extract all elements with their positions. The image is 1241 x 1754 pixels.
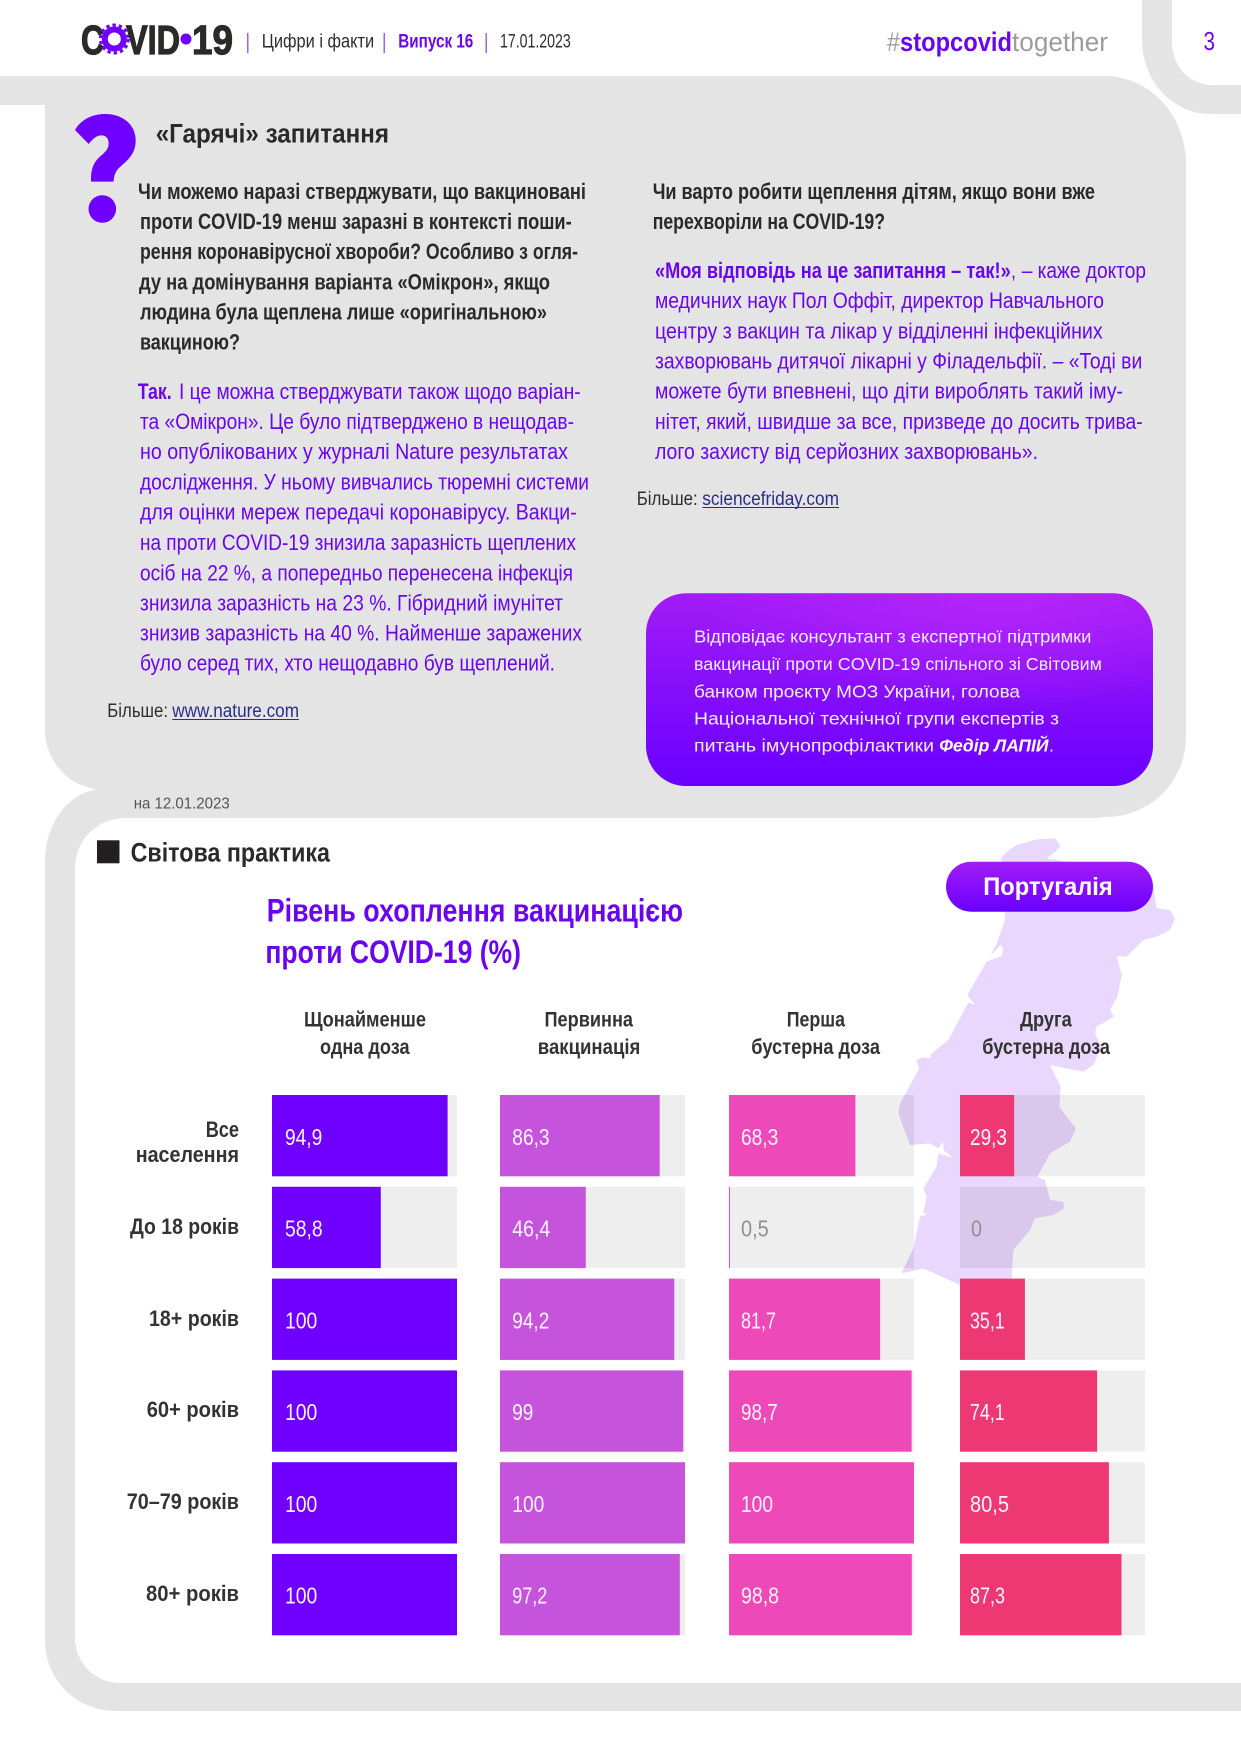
row labels bbox=[127, 1117, 239, 1606]
logo: COVID-19: C bbox=[81, 17, 104, 63]
column headers: бустерна доза bbox=[982, 1036, 1110, 1059]
answer 2: медичних наук Пол Оффіт, директор Навчального bbox=[655, 288, 1104, 313]
chart column: first booster: 98,8 bbox=[741, 1582, 779, 1608]
chart column: second booster: 29,3 bbox=[970, 1124, 1007, 1150]
chart column: at least one dose bbox=[272, 1095, 457, 1635]
chart column: primary vaccination: 86,3 bbox=[512, 1124, 550, 1150]
question 2: перехворіли на COVID-19? bbox=[653, 209, 885, 234]
chart column: at least one dose: 100 bbox=[285, 1399, 317, 1425]
callout: consultant: вакцинації проти COVID-19 спільного зі Світовим bbox=[694, 654, 1102, 674]
heading: «Гарячі» запитання bbox=[156, 119, 389, 149]
column headers: Друга bbox=[1020, 1009, 1072, 1032]
source link: sciencefriday: Більше: bbox=[637, 489, 698, 510]
answer 1: на проти COVID-19 знизила заразність щеплених bbox=[140, 530, 577, 555]
source link: nature bbox=[107, 701, 299, 722]
icon: question mark bbox=[75, 114, 136, 223]
answer 1: Так. bbox=[138, 379, 172, 404]
row labels: 80+ років bbox=[146, 1581, 239, 1606]
row labels: населення bbox=[136, 1142, 239, 1167]
chart column: at least one dose: 58,8 bbox=[285, 1216, 323, 1242]
question 2: Чи варто робити щеплення дітям, якщо вони вже bbox=[653, 179, 1095, 204]
answer 1: І це можна стверджувати також щодо варіан- bbox=[179, 379, 581, 404]
page corner ring bbox=[1142, 0, 1241, 114]
source link: sciencefriday bbox=[637, 489, 839, 510]
column headers: Перша bbox=[787, 1009, 845, 1032]
row labels: Все bbox=[206, 1117, 239, 1142]
section heading: world practice: Світова практика bbox=[131, 838, 330, 868]
chart column: first booster: 98,7 bbox=[741, 1399, 778, 1425]
column headers: бустерна доза bbox=[751, 1036, 880, 1059]
page number: 3 bbox=[1204, 26, 1215, 56]
answer 1: та «Омікрон». Це було підтверджено в нещодав- bbox=[140, 409, 574, 434]
answer 2: лого захисту від серйозних захворювань». bbox=[655, 439, 1038, 464]
answer 2: , bbox=[1011, 258, 1016, 283]
answer 1: осіб на 22 %, а попередньо перенесена інфекція bbox=[140, 560, 573, 585]
chart column: primary vaccination: 94,2 bbox=[512, 1308, 549, 1334]
source link: nature: Більше: bbox=[107, 701, 168, 722]
column headers: Первинна bbox=[544, 1009, 633, 1032]
chart column: second booster: 35,1 bbox=[970, 1308, 1005, 1334]
answer 1: дослідження. У ньому вивчались тюремні системи bbox=[140, 470, 589, 495]
issue number: Випуск 16 bbox=[398, 31, 473, 52]
panel: hot questions bbox=[0, 76, 1186, 817]
source link: nature: www.nature.com bbox=[171, 701, 299, 722]
pill: Portugal: Португалія bbox=[983, 873, 1113, 901]
logo: COVID-19 bbox=[81, 17, 233, 63]
answer 2: захворювань дитячої лікарні у Філадельфії. – «Тоді ви bbox=[655, 348, 1142, 373]
chart title: Рівень охоплення вакцинацією bbox=[267, 893, 683, 929]
row labels: До 18 років bbox=[130, 1214, 239, 1239]
column headers: вакцинація bbox=[538, 1036, 640, 1059]
answer 1: знизив заразність на 40 %. Найменше заражених bbox=[140, 620, 583, 645]
chart column: first booster bbox=[729, 1095, 914, 1635]
chart title: проти COVID-19 (%) bbox=[265, 934, 521, 970]
answer 1: було серед тих, хто нещодавно був щеплений. bbox=[140, 650, 555, 675]
question 1: проти COVID-19 менш заразні в контексті поши- bbox=[140, 209, 572, 234]
date: 17.01.2023 bbox=[500, 31, 571, 52]
hashtag: together bbox=[1012, 27, 1108, 57]
column headers: Щонайменше bbox=[304, 1009, 426, 1032]
chart column: primary vaccination: 46,4 bbox=[512, 1216, 550, 1242]
answer 2: нітет, який, швидше за все, призведе до досить трива- bbox=[655, 409, 1143, 434]
chart column: at least one dose: 100 bbox=[285, 1308, 317, 1334]
chart column: primary vaccination: 99 bbox=[512, 1399, 533, 1425]
chart column: second booster: 80,5 bbox=[970, 1491, 1009, 1517]
chart column: at least one dose: 94,9 bbox=[285, 1124, 322, 1150]
row labels: 70–79 років bbox=[127, 1489, 239, 1514]
chart column: first booster: 100 bbox=[741, 1491, 773, 1517]
callout: consultant: Відповідає консультант з експертної підтримки bbox=[694, 627, 1091, 647]
callout: consultant: Національної технічної групи експертів з bbox=[694, 709, 1059, 729]
column headers bbox=[304, 1009, 1110, 1059]
answer 1: для оцінки мереж передачі коронавірусу. Вакци- bbox=[140, 500, 577, 525]
hashtag: # bbox=[887, 27, 900, 57]
answer 2 bbox=[655, 258, 1146, 464]
date note: на 12.01.2023 bbox=[134, 795, 230, 812]
question 1: ду на домінування варіанта «Омікрон», якщо bbox=[139, 270, 550, 295]
callout: consultant: Федір ЛАПІЙ bbox=[939, 735, 1049, 756]
chart column: second booster bbox=[960, 1095, 1145, 1635]
callout: consultant: . bbox=[1049, 736, 1054, 756]
callout: consultant: банком проєкту МОЗ України, голова bbox=[694, 681, 1020, 701]
answer 2: – каже доктор bbox=[1022, 258, 1146, 283]
pill: Portugal bbox=[946, 862, 1153, 912]
chart column: at least one dose: 100 bbox=[285, 1582, 317, 1608]
chart column: first booster: 0,5 bbox=[741, 1216, 769, 1242]
chart column: second booster: 0 bbox=[971, 1216, 982, 1242]
question 1: Чи можемо наразі стверджувати, що вакциновані bbox=[138, 179, 586, 204]
chart column: primary vaccination: 97,2 bbox=[512, 1582, 547, 1608]
logo: COVID-19: 19 bbox=[192, 17, 233, 63]
question 1 bbox=[138, 179, 586, 355]
map of Portugal bbox=[898, 838, 1175, 1285]
chart column: at least one dose: 100 bbox=[285, 1491, 317, 1517]
source link: sciencefriday: sciencefriday.com bbox=[702, 489, 839, 510]
lower panel frame bbox=[45, 789, 1241, 1711]
header bbox=[81, 17, 1215, 63]
question 1: людина була щеплена лише «оригінальною» bbox=[140, 300, 547, 325]
logo: COVID-19: VID bbox=[126, 17, 180, 63]
chart title bbox=[265, 893, 683, 970]
chart column: primary vaccination bbox=[500, 1095, 685, 1635]
issue title: Цифри і факти bbox=[262, 31, 374, 52]
chart column: primary vaccination: 100 bbox=[512, 1491, 544, 1517]
hashtag: stopcovid bbox=[900, 27, 1012, 57]
answer 1: знизила заразність на 23 %. Гібридний імунітет bbox=[140, 590, 563, 615]
question 1: рення коронавірусної хвороби? Особливо з огля- bbox=[140, 239, 578, 264]
question 1: вакциною? bbox=[140, 330, 240, 355]
chart column: first booster: 81,7 bbox=[741, 1308, 776, 1334]
answer 2: «Моя відповідь на це запитання – так!» bbox=[655, 258, 1011, 283]
answer 2: можете бути впевнені, що діти вироблять такий іму- bbox=[655, 378, 1123, 403]
chart column: second booster: 87,3 bbox=[970, 1582, 1005, 1608]
answer 2: центру з вакцин та лікар у відділенні інфекційних bbox=[655, 318, 1103, 343]
row labels: 60+ років bbox=[147, 1397, 239, 1422]
callout: consultant bbox=[646, 593, 1153, 786]
answer 1: но опублікованих у журналі Nature результатах bbox=[140, 439, 569, 464]
chart column: second booster: 74,1 bbox=[970, 1399, 1005, 1425]
column headers: одна доза bbox=[320, 1036, 410, 1059]
chart column: first booster: 68,3 bbox=[741, 1124, 778, 1150]
row labels: 18+ років bbox=[149, 1306, 239, 1331]
question 2 bbox=[653, 179, 1095, 234]
answer 1 bbox=[138, 379, 589, 675]
callout: consultant: питань імунопрофілактики bbox=[694, 736, 934, 756]
hashtag bbox=[887, 27, 1108, 57]
